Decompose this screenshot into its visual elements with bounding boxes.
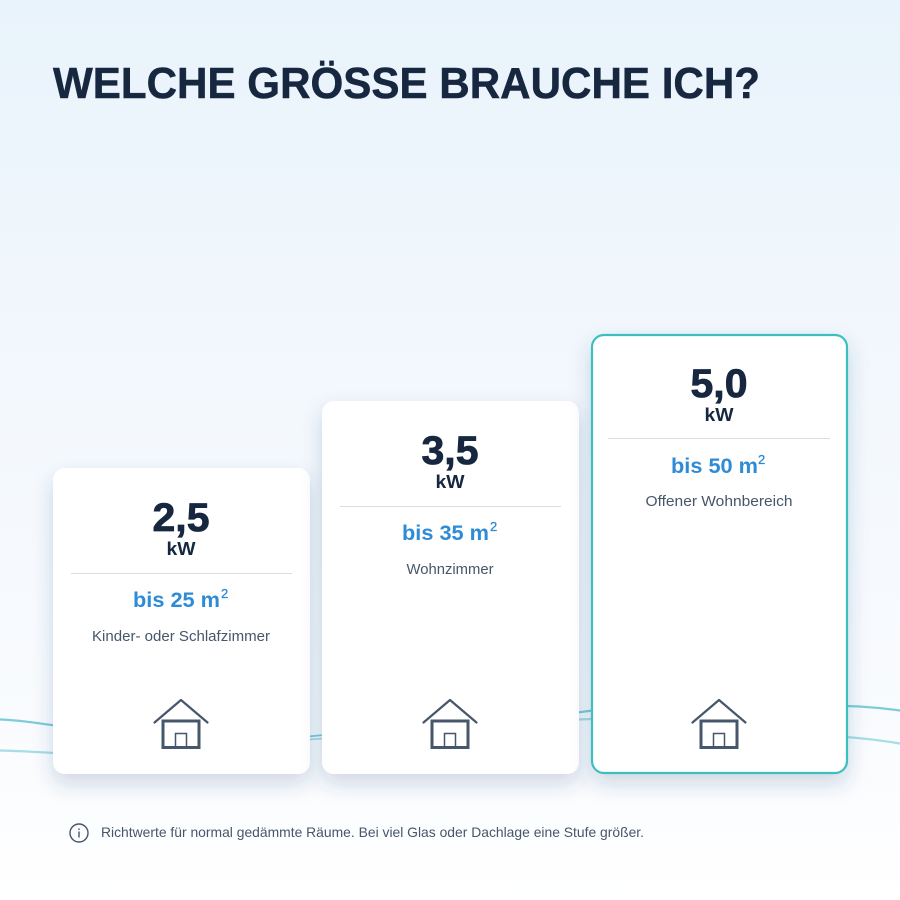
- area: bis 25 m: [133, 589, 220, 612]
- panel: 5,0 kW card highlighted: [592, 335, 847, 773]
- area: bis 35 m: [402, 522, 489, 545]
- unit: kW: [166, 539, 196, 559]
- superscript: 2: [490, 519, 497, 534]
- panel: 3,5 kW card: [322, 401, 579, 774]
- title: WELCHE GRÖSSE BRAUCHE ICH?: [53, 59, 760, 108]
- room type: Kinder- oder Schlafzimmer: [92, 629, 270, 645]
- icon: house: [424, 700, 476, 748]
- icon: house: [154, 700, 208, 748]
- room type: Wohnzimmer: [406, 562, 494, 578]
- footnote: Richtwerte für normal gedämmte Räume. Bei viel Glas oder Dachlage eine Stufe größer.: [101, 824, 644, 840]
- power value: 3,5: [422, 429, 478, 473]
- superscript: 2: [758, 452, 765, 467]
- room type: Offener Wohnbereich: [646, 494, 792, 510]
- power value: 2,5: [152, 496, 210, 540]
- unit: kW: [436, 472, 465, 492]
- power value: 5,0: [690, 362, 748, 406]
- decorative waves: [0, 706, 900, 753]
- superscript: 2: [221, 586, 228, 601]
- panel: 2,5 kW card: [53, 468, 310, 774]
- icon: info: [70, 824, 88, 842]
- area: bis 50 m: [671, 455, 758, 478]
- icon: house: [692, 700, 746, 748]
- unit: kW: [704, 405, 734, 425]
